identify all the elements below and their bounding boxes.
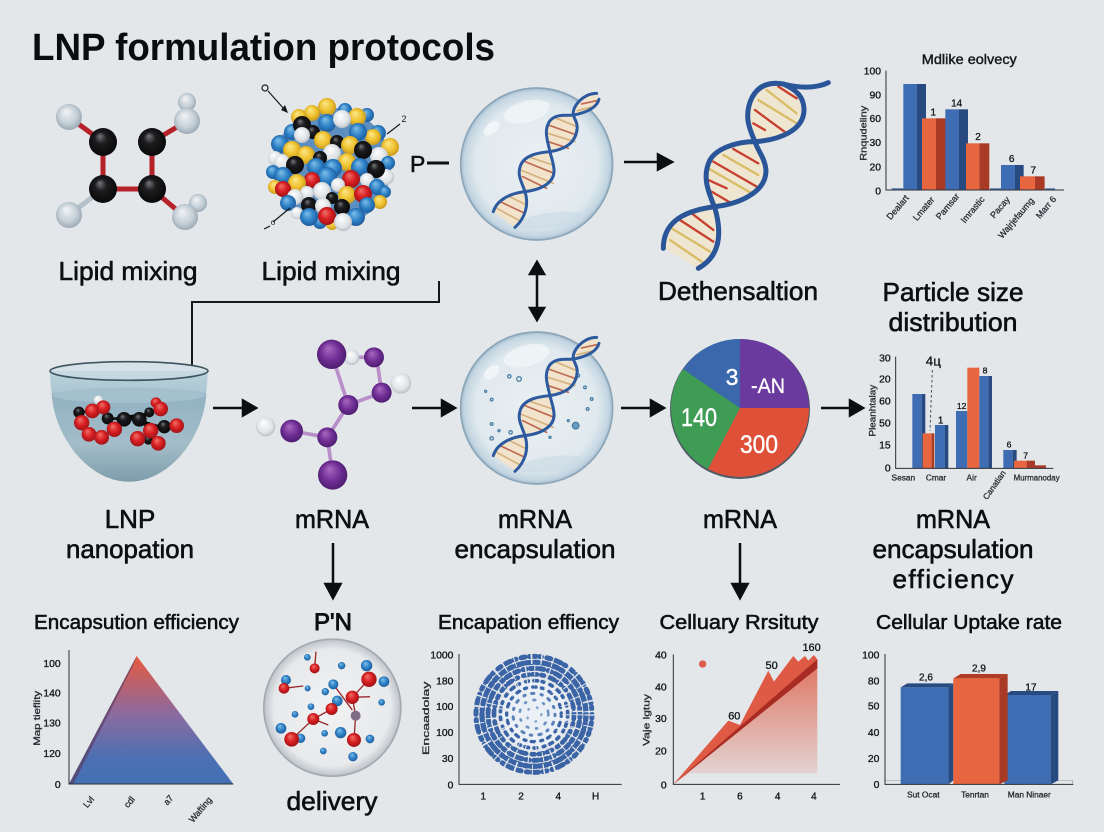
triangle chart: 100	[43, 659, 61, 670]
label: mRNA encapsulation: encapsulation	[454, 534, 616, 564]
area chart: 60	[728, 711, 740, 723]
bar chart: cellular uptake: 40	[868, 728, 880, 739]
bar chart: Mdlike eolvecy: 14	[951, 98, 963, 109]
triangle chart	[32, 650, 233, 824]
bar chart: Mdlike eolvecy: Imrastic	[959, 194, 987, 225]
pie chart: -AN	[751, 375, 785, 398]
triangle chart: 130	[43, 718, 61, 729]
icon: large DNA helix	[663, 83, 828, 268]
triangle chart: 140	[43, 688, 61, 699]
icon: purple mRNA molecule	[256, 340, 411, 490]
bar chart: Mdlike eolvecy	[858, 52, 1064, 240]
icon: encapsulation vesicle with DNA	[461, 332, 613, 484]
bar chart: particle distribution: 30	[879, 353, 891, 364]
bar chart: cellular uptake: 2,9	[972, 664, 986, 675]
arrow: pie label down	[732, 543, 748, 598]
scatter chart: 0	[448, 781, 454, 792]
bar chart: particle distribution: 8	[983, 365, 988, 375]
label: mRNA pie: mRNA	[703, 504, 778, 534]
chart title: Mdlike eolvecy	[922, 52, 1017, 67]
scatter chart: 180	[436, 676, 454, 687]
arrow: encapsulation to pie	[621, 400, 664, 416]
connector line	[192, 281, 439, 365]
label: particle size distribution	[882, 277, 1024, 337]
arrow: mRNA to encapsulation	[412, 400, 455, 416]
bar chart: Mdlike eolvecy: Wajrjefaumg	[996, 196, 1036, 240]
bar chart: Mdlike eolvecy: 7	[1031, 165, 1037, 176]
pie chart: 140	[681, 404, 717, 432]
bar chart: particle distribution: Pleanhtalay	[868, 384, 878, 436]
scatter chart: 1000	[430, 650, 454, 661]
heading: cellular uptake rate: Cellular Uptake rate	[876, 612, 1062, 634]
bar chart: cellular uptake: 80	[868, 676, 880, 687]
bar chart: Mdlike eolvecy: Pacay	[988, 194, 1012, 220]
area chart	[642, 642, 840, 803]
area chart: 4	[811, 792, 817, 803]
triangle chart: Lvl	[81, 794, 96, 810]
pie chart	[670, 339, 810, 479]
label: mRNA encapsulation: mRNA	[498, 504, 573, 534]
heading: celluary rrsituty: Celluary Rrsituty	[660, 612, 818, 634]
label: dethensaltion: Dethensaltion	[658, 276, 818, 306]
bar chart: particle distribution: 7	[1023, 451, 1028, 461]
bar chart: particle distribution: 20	[879, 374, 891, 385]
bar chart: particle distribution: 15	[879, 440, 891, 451]
bar chart: Mdlike eolvecy: 20	[869, 162, 881, 173]
icon: vesicle with DNA	[461, 88, 613, 240]
bar chart: particle distribution: 1	[938, 415, 944, 426]
label: mRNA encapsulation efficiency: mRNA	[916, 504, 991, 534]
area chart: 30	[655, 714, 667, 725]
scatter chart: Encaadolay	[421, 681, 431, 755]
arrow: bowl to mRNA	[213, 400, 256, 416]
area chart: 1	[700, 792, 706, 803]
bar chart: cellular uptake: 17	[1025, 683, 1037, 694]
area chart: 4	[775, 792, 781, 803]
label: LNP nanopation	[66, 504, 194, 564]
bar chart: Mdlike eolvecy: Pamsar	[934, 191, 961, 221]
bar chart: cellular uptake: Tenrtan	[961, 789, 989, 799]
bar chart: particle distribution: 50	[879, 419, 891, 430]
scatter chart: 4	[556, 792, 562, 803]
label: mRNA encapsulation	[454, 504, 616, 564]
label: LNP nanopation: LNP	[105, 504, 155, 534]
scatter chart: 100	[436, 702, 454, 713]
label: P with dash: P	[410, 151, 425, 177]
bar chart: particle distribution: 60	[879, 397, 891, 408]
label: mRNA encapsulation efficiency: encapsulation	[872, 534, 1034, 564]
bar chart: particle distribution: Sesan	[892, 472, 915, 482]
icon: lipid nanoparticle cluster: o	[271, 218, 276, 227]
arrow: double vertical	[530, 262, 544, 320]
bar chart: Mdlike eolvecy: 6	[1009, 154, 1015, 165]
scatter chart: 30	[442, 754, 454, 765]
bar chart: particle distribution: Canatian	[981, 468, 1008, 501]
area chart: 160	[802, 642, 821, 654]
label: lipid mixing 2: Lipid mixing	[262, 256, 400, 286]
pie chart: 3	[726, 364, 738, 390]
bar chart: particle distribution: 0	[885, 464, 891, 475]
bar chart: cellular uptake: Sut Ocat	[907, 789, 940, 799]
bar chart: Mdlike eolvecy: 1	[931, 107, 937, 118]
bar chart: particle distribution	[868, 353, 1060, 501]
heading: P'N: P'N	[314, 609, 352, 636]
arrow: mRNA down	[326, 543, 340, 598]
bar chart: Mdlike eolvecy: 90	[869, 91, 881, 102]
bar chart: cellular uptake: Man Ninaer	[1008, 789, 1051, 799]
triangle chart: a7	[161, 793, 175, 807]
label: mRNA encapsulation efficiency	[872, 504, 1034, 594]
bar chart: Mdlike eolvecy: 100	[864, 67, 881, 78]
scatter chart	[421, 650, 622, 803]
icon: bowl with lipids	[50, 362, 208, 482]
triangle chart: 0	[55, 780, 61, 791]
bar chart: particle distribution: Air	[967, 472, 977, 482]
bar chart: Mdlike eolvecy: 0	[875, 186, 881, 197]
icon: delivery sphere	[264, 639, 401, 776]
label: mRNA encapsulation efficiency: efficiency	[892, 564, 1014, 594]
label: LNP nanopation: nanopation	[66, 534, 194, 564]
scatter chart: 1	[481, 792, 487, 803]
bar chart: Mdlike eolvecy: 60	[869, 114, 881, 125]
area chart: 50	[766, 660, 778, 672]
label: particle size distribution: Particle size	[882, 277, 1024, 307]
bar chart: Mdlike eolvecy: Rnqudeliny	[858, 105, 868, 161]
bar chart: cellular uptake: 2,6	[919, 673, 933, 684]
arrow: pie to chart	[821, 400, 863, 416]
scatter chart: 100	[436, 728, 454, 739]
bar chart: Mdlike eolvecy: Marr 6	[1034, 194, 1058, 221]
bar chart: particle distribution: Cmar	[926, 472, 946, 482]
icon: lipid nanoparticle cluster	[262, 85, 407, 231]
area chart: 40	[655, 651, 667, 662]
bar chart: cellular uptake: 20	[868, 754, 880, 765]
bar chart: particle distribution: 12	[957, 401, 967, 411]
bar chart: cellular uptake: 0	[874, 780, 880, 791]
bar chart: particle distribution: 6	[1007, 440, 1012, 450]
bar chart: particle distribution: Murmanoday	[1014, 472, 1060, 482]
label: mRNA: mRNA	[295, 504, 370, 534]
bar chart: cellular uptake	[862, 651, 1073, 799]
triangle chart: 120	[43, 749, 61, 760]
bar chart: Mdlike eolvecy: Dealart	[885, 193, 911, 222]
icon: lipid molecule	[56, 93, 207, 230]
heading: encapation effiency: Encapation effiency	[438, 612, 619, 634]
icon: lipid nanoparticle cluster: 2	[401, 114, 407, 124]
label: particle size distribution: distribution	[888, 307, 1018, 337]
heading: encapsution efficiency: Encapsution efficiency	[34, 612, 239, 634]
bar chart: Mdlike eolvecy: 30	[869, 138, 881, 149]
bar chart: cellular uptake: 100	[862, 651, 880, 662]
bar chart: particle distribution: 4ц	[926, 353, 941, 368]
area chart: 6	[737, 792, 743, 803]
area chart: Vaje lgtuy	[642, 693, 652, 746]
label: P with dash	[410, 151, 449, 177]
bar chart: Mdlike eolvecy: Lmater	[911, 195, 937, 223]
pie chart: 300	[740, 431, 778, 459]
scatter chart: 2	[518, 792, 524, 803]
bar chart: cellular uptake: 50	[868, 702, 880, 713]
label: delivery: delivery	[286, 786, 378, 816]
area chart: 0	[661, 781, 667, 792]
label: lipid mixing: Lipid mixing	[58, 256, 198, 286]
scatter chart: H	[592, 792, 599, 803]
triangle chart: cdl	[122, 794, 137, 810]
area chart: 40	[655, 682, 667, 693]
triangle chart: Map tieflity	[32, 690, 42, 746]
triangle chart: Wafting	[187, 795, 214, 824]
area chart: 20	[655, 746, 667, 757]
title: LNP formulation protocols	[32, 27, 495, 69]
bar chart: Mdlike eolvecy: 2	[975, 132, 981, 143]
arrow: vesicle to DNA	[624, 154, 672, 170]
